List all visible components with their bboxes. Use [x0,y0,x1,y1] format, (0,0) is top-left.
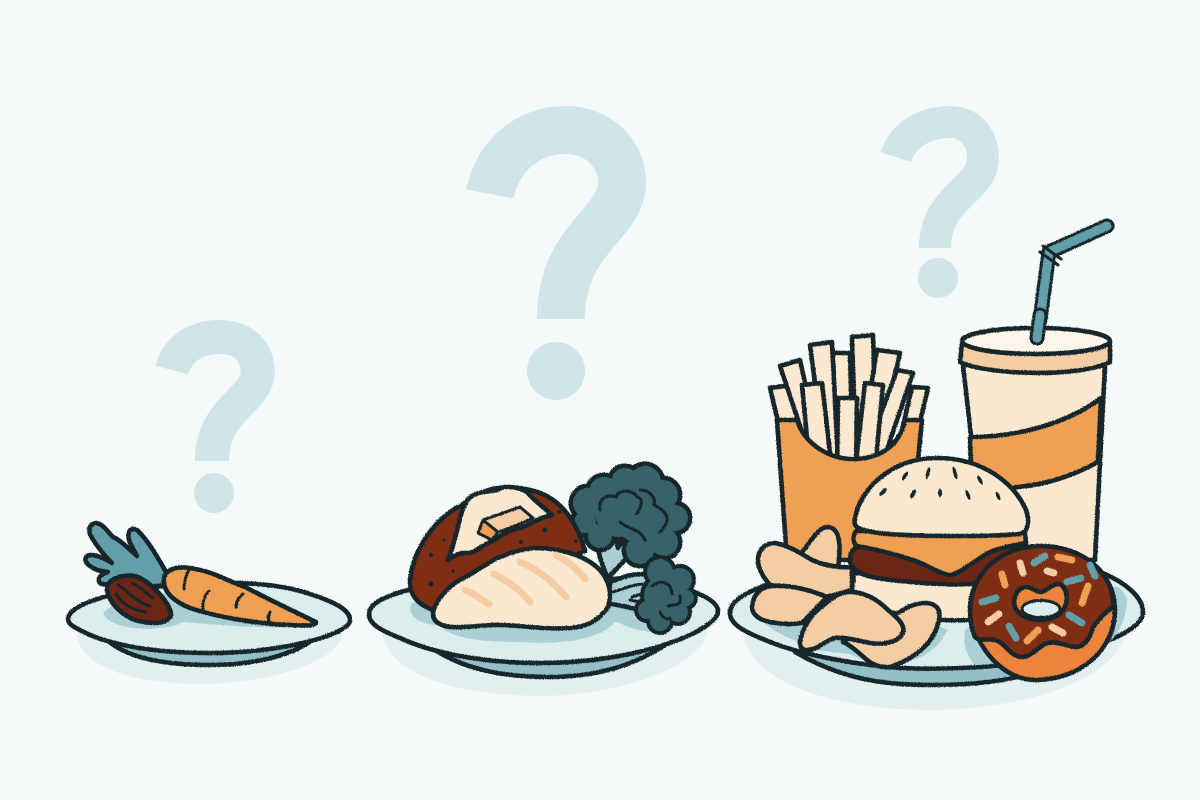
food shadow: medium [410,593,693,643]
plate shadow: small [77,630,343,684]
icon: carrot [164,567,316,626]
straw end [1037,315,1040,338]
icon: donut [970,546,1115,680]
icon: french fries [770,335,928,560]
plate shadow: large [743,625,1126,710]
plate: medium [369,578,718,677]
chip [758,543,852,597]
chip [752,586,827,624]
sesame seeds [878,466,1002,501]
question mark: left [172,337,258,513]
patty [850,547,1020,584]
medium plate with potato, chicken and broccoli [369,466,718,696]
chip [800,592,903,650]
icon: carrot greens [86,523,170,587]
butter pat [478,507,533,540]
fries box [777,420,922,560]
chip [843,603,940,667]
cup band [970,398,1101,500]
bottom bun [852,573,1000,620]
small plate with carrot and nut [68,523,350,684]
icon: chips front [752,543,940,667]
icon: chips back [802,527,840,567]
potato skin specks [428,510,578,586]
plate: large [730,572,1143,685]
icon: baked potato [410,487,585,612]
top bun [854,458,1028,536]
food shadow: small [103,590,316,629]
plate: small [68,583,350,665]
icon: chicken breast [433,548,610,628]
large plate with fast food [730,226,1143,710]
icon: drinking straw [1040,226,1107,320]
cup lid top [962,328,1110,354]
plate shadow: medium [382,625,708,696]
cup lid rim [960,344,1110,373]
potato filling [448,487,552,560]
question mark: right [896,122,983,298]
icon: large broccoli floret [573,466,688,564]
donut hole [1014,584,1067,620]
donut sprinkles [982,556,1095,641]
icon: drink cup [960,315,1110,560]
icon: nut [107,576,171,623]
icon: small broccoli floret [638,559,694,631]
icon: burger [850,458,1028,620]
question mark: centre [490,130,622,400]
donut icing [970,546,1113,657]
icon: broccoli stalk [594,520,652,618]
cheese [854,531,1026,575]
food shadow: large [752,587,1127,665]
